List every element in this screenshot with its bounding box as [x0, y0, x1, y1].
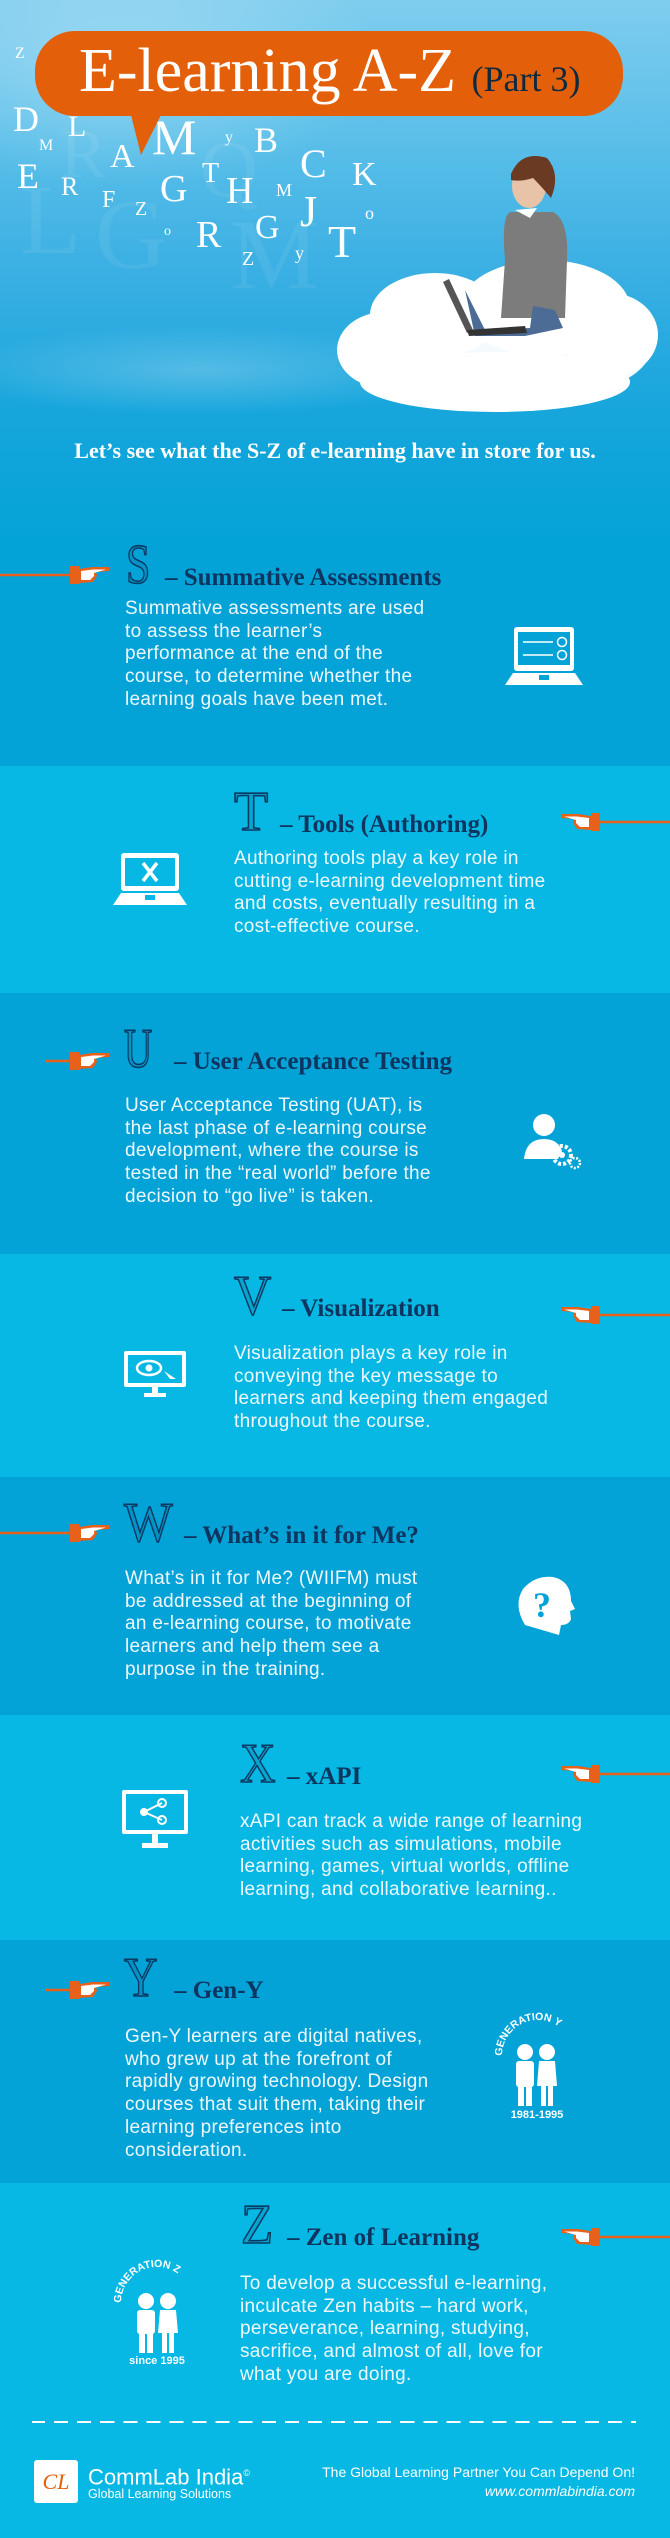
- scattered letters: R: [61, 172, 78, 201]
- footer tagline: www.commlabindia.com: [485, 2483, 635, 2499]
- text block: learning goals have been met.: [125, 689, 388, 710]
- scattered letters: E: [17, 156, 39, 196]
- text block: courses that suit them, taking their: [125, 2094, 425, 2115]
- scattered letters: C: [300, 141, 327, 186]
- icon: generation Z: GENERATION Z: [114, 2260, 182, 2302]
- scattered letters: y: [295, 243, 304, 263]
- text block: performance at the end of the: [125, 643, 383, 664]
- footer tagline: [322, 2464, 635, 2499]
- text block: learning, and collaborative learning..: [240, 1879, 557, 1900]
- text block: User Acceptance Testing (UAT), is: [125, 1095, 422, 1116]
- scattered letters: H: [226, 170, 253, 212]
- panel: T: [0, 766, 670, 993]
- text block: Visualization plays a key role in: [234, 1343, 508, 1364]
- hand pointer: [0, 1524, 109, 1542]
- footer logo: CommLab India©: [88, 2464, 250, 2489]
- scattered letters: G: [255, 209, 280, 246]
- scattered letters: o: [365, 203, 374, 223]
- scattered letters: Z: [242, 248, 254, 270]
- text block: activities such as simulations, mobile: [240, 1834, 562, 1855]
- icon: monitor with share nodes: [122, 1790, 188, 1848]
- faint background letters: M: [230, 199, 319, 310]
- scattered letters: J: [300, 187, 317, 236]
- heading: [234, 781, 488, 843]
- heading: [123, 1492, 419, 1554]
- scattered letters: L: [68, 110, 86, 143]
- scattered letters: M: [276, 180, 292, 200]
- text block: [125, 598, 424, 710]
- panel: Y: [0, 1940, 670, 2183]
- subtitle: Let’s see what the S-Z of e-learning have in store for us.: [74, 438, 596, 463]
- footer tagline: The Global Learning Partner You Can Depend On!: [322, 2464, 635, 2480]
- heading: – xAPI: [287, 1763, 361, 1790]
- hand pointer: [561, 1765, 670, 1783]
- faint background letters: [20, 116, 319, 310]
- heading: [241, 2194, 480, 2256]
- text block: xAPI can track a wide range of learning: [240, 1811, 582, 1832]
- heading: – Summative Assessments: [165, 564, 441, 591]
- hand pointer: [0, 566, 109, 584]
- scattered letters: T: [202, 158, 219, 189]
- text block: the last phase of e-learning course: [125, 1118, 427, 1139]
- panel: U: [0, 993, 670, 1254]
- faint background letters: L: [20, 164, 81, 275]
- panel: S: [0, 545, 670, 766]
- heading: V: [234, 1265, 271, 1327]
- heading: [124, 1947, 264, 2009]
- heading: U: [124, 1018, 152, 1080]
- title speech bubble: E-learning A-Z (Part 3): [79, 37, 580, 105]
- text block: course, to determine whether the: [125, 666, 412, 687]
- text block: Summative assessments are used: [125, 598, 424, 619]
- icon: user with gears: [524, 1114, 582, 1170]
- icon: CL logo: [34, 2460, 78, 2503]
- heading: – Zen of Learning: [287, 2224, 479, 2251]
- text block: [125, 1095, 431, 1207]
- hand pointer: [561, 2228, 670, 2246]
- text block: [234, 848, 546, 937]
- heading: – User Acceptance Testing: [174, 1048, 452, 1075]
- text block: learning preferences into: [125, 2117, 342, 2138]
- footer logo: Global Learning Solutions: [88, 2487, 231, 2501]
- heading: – Visualization: [282, 1295, 440, 1322]
- text block: learners and help them see a: [125, 1636, 380, 1657]
- hand pointer: [45, 1981, 109, 1999]
- text block: who grew up at the forefront of: [125, 2049, 392, 2070]
- heading: S: [126, 534, 150, 596]
- text block: rapidly growing technology. Design: [125, 2071, 428, 2092]
- heading: Y: [124, 1947, 158, 2009]
- icon: generation Z: [114, 2260, 185, 2365]
- text block: What’s in it for Me? (WIIFM) must: [125, 1568, 417, 1589]
- scattered letters: Z: [15, 45, 25, 62]
- icon: generation Y: [494, 2012, 563, 2120]
- footer logo: [34, 2460, 250, 2503]
- icon: monitor with eye: [124, 1351, 186, 1397]
- scattered letters: M: [39, 137, 53, 154]
- icon: laptop tools: [113, 853, 187, 905]
- text block: consideration.: [125, 2140, 248, 2161]
- text block: [240, 1811, 582, 1900]
- heading: [234, 1265, 440, 1327]
- hand pointer: [561, 813, 670, 831]
- text block: what you are doing.: [240, 2364, 412, 2385]
- faint background letters: Q: [200, 126, 258, 214]
- text block: perseverance, learning, studying,: [240, 2318, 530, 2339]
- scattered letters: K: [352, 156, 377, 193]
- text block: cost-effective course.: [234, 916, 420, 937]
- scattered letters: T: [328, 216, 356, 267]
- text block: sacrifice, and almost of all, love for: [240, 2341, 543, 2362]
- text block: [125, 1568, 418, 1680]
- text block: throughout the course.: [234, 1411, 431, 1432]
- icon: generation Y: GENERATION Y: [494, 2012, 563, 2056]
- text block: [234, 1343, 548, 1432]
- heading: – What’s in it for Me?: [184, 1522, 419, 1549]
- scattered letters: D: [13, 99, 39, 139]
- text block: be addressed at the beginning of: [125, 1591, 411, 1612]
- icon: head with question mark: ?: [533, 1585, 551, 1625]
- scattered letters: B: [254, 120, 278, 160]
- text block: development, where the course is: [125, 1140, 419, 1161]
- text block: decision to “go live” is taken.: [125, 1186, 374, 1207]
- scattered letters: R: [196, 214, 221, 256]
- text block: an e-learning course, to motivate: [125, 1613, 412, 1634]
- hero background: [0, 0, 670, 545]
- heading: X: [240, 1733, 276, 1795]
- text block: [240, 2273, 547, 2385]
- scattered letters: y: [225, 129, 233, 146]
- scattered letters: o: [164, 224, 171, 239]
- hand pointer: [561, 1306, 670, 1324]
- icon: CL logo: CL: [43, 2469, 69, 2494]
- panel: X: [0, 1715, 670, 1940]
- hand pointer: [45, 1052, 109, 1070]
- text block: purpose in the training.: [125, 1659, 326, 1680]
- heading: T: [234, 781, 268, 843]
- text block: learning, games, virtual worlds, offline: [240, 1856, 570, 1877]
- text block: conveying the key message to: [234, 1366, 498, 1387]
- scattered letters: [13, 45, 377, 270]
- panel: V: [0, 1254, 670, 1477]
- scattered letters: G: [160, 168, 187, 210]
- faint background letters: G: [95, 179, 167, 290]
- text block: Gen-Y learners are digital natives,: [125, 2026, 422, 2047]
- scattered letters: M: [152, 109, 196, 165]
- heading: W: [124, 1492, 173, 1554]
- heading: – Tools (Authoring): [280, 811, 488, 838]
- icon: head with question mark: [518, 1576, 575, 1635]
- text block: inculcate Zen habits – hard work,: [240, 2296, 529, 2317]
- heading: Z: [241, 2194, 273, 2256]
- woman on cloud: [337, 156, 658, 412]
- faint background letters: R: [60, 116, 107, 193]
- scattered letters: Z: [135, 198, 147, 220]
- panel: W: [0, 1477, 670, 1715]
- heading: – Gen-Y: [174, 1977, 264, 2004]
- scattered letters: F: [102, 187, 115, 213]
- text block: learners and keeping them engaged: [234, 1388, 548, 1409]
- text block: to assess the learner’s: [125, 621, 322, 642]
- icon: laptop checklist: [505, 627, 583, 685]
- text block: To develop a successful e-learning,: [240, 2273, 547, 2294]
- text block: [125, 2026, 428, 2161]
- title speech bubble: [35, 31, 623, 155]
- heading: [240, 1733, 361, 1795]
- text block: cutting e-learning development time: [234, 871, 546, 892]
- panel: Z: [0, 2183, 670, 2538]
- text block: and costs, eventually resulting in a: [234, 893, 535, 914]
- scattered letters: A: [110, 138, 135, 175]
- heading: [124, 1018, 452, 1080]
- text block: Authoring tools play a key role in: [234, 848, 519, 869]
- heading: [126, 534, 441, 596]
- text block: tested in the “real world” before the: [125, 1163, 431, 1184]
